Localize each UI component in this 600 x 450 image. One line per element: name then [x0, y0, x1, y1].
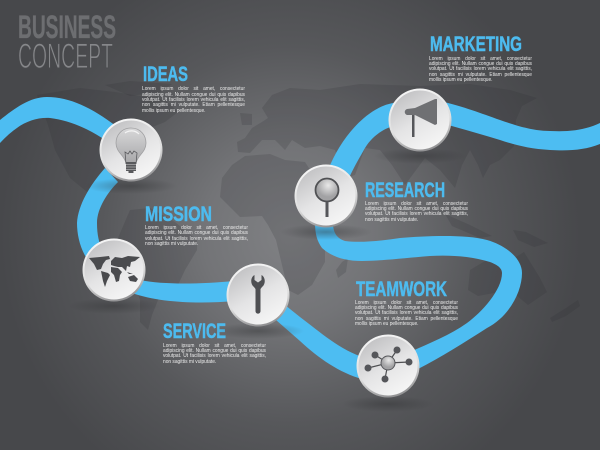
body: research: adipiscing elit. Nullam congue dui quis dapibus	[365, 206, 468, 212]
title: concept: CONCEPT	[18, 37, 113, 76]
icon: world map	[89, 256, 140, 287]
ribbon: service to teamwork	[276, 305, 365, 379]
background world map	[37, 81, 580, 330]
body: teamwork: Lorem ipsum dolor sit amet, consectetur	[355, 300, 458, 306]
node: marketing megaphone	[374, 88, 466, 164]
body: ideas: mollis ipsum eu pellentesque.	[142, 108, 205, 114]
ribbon: research to marketing	[328, 102, 400, 180]
body: service: Lorem ipsum dolor sit amet, consectetur	[163, 343, 266, 349]
body: mission	[145, 225, 248, 247]
icon: light bulb	[116, 128, 146, 173]
body: service	[163, 343, 266, 365]
icon: wrench	[251, 275, 265, 314]
body: marketing: mollis ipsum eu pellentesque.	[429, 77, 492, 83]
body: marketing: non sagittis mi vulputate. Etiam pellentesque	[429, 72, 532, 78]
node: research magnifier	[280, 164, 372, 240]
body: teamwork: adipiscing elit. Nullam congue dui quis dapibus	[355, 305, 458, 311]
heading: marketing: MARKETING	[430, 33, 522, 56]
body: ideas	[142, 86, 245, 114]
body: mission: volutpat. Ut facilisis lorem vehicula elit sagittis,	[145, 236, 248, 242]
icon: magnifier	[316, 178, 338, 217]
body: service: volutpat. Ut facilisis lorem vehicula elit sagittis,	[163, 353, 266, 359]
body: teamwork	[355, 300, 458, 327]
node: mission world map	[68, 238, 160, 314]
body: ideas: non sagittis mi vulputate. Etiam pellentesque	[142, 102, 245, 108]
body: marketing: volutpat. Ut facilisis lorem vehicula elit sagittis,	[429, 66, 532, 72]
body: teamwork: mollis ipsum eu pellentesque.	[355, 321, 418, 327]
body: service: adipiscing elit. Nullam congue dui quis dapibus	[163, 348, 266, 354]
ribbon: ideas to mission	[77, 168, 118, 259]
heading: service: SERVICE	[163, 320, 226, 343]
body: mission: Lorem ipsum dolor sit amet, consectetur	[145, 225, 248, 231]
node: service wrench	[212, 264, 304, 339]
ribbon: mission to service	[132, 280, 235, 302]
body: mission: non sagittis mi vulputate.	[145, 241, 198, 247]
heading: mission: MISSION	[145, 203, 212, 226]
ribbon: marketing to right exit	[440, 101, 600, 150]
title	[18, 9, 116, 76]
node: teamwork network	[342, 334, 434, 412]
ribbon: left entry to ideas	[0, 97, 116, 143]
body: teamwork: non sagittis mi vulputate. Etiam pellentesque	[355, 316, 458, 322]
body: ideas: Lorem ipsum dolor sit amet, consectetur	[142, 86, 245, 92]
heading: teamwork: TEAMWORK	[356, 278, 447, 301]
body: research	[365, 201, 468, 223]
heading: research: RESEARCH	[365, 179, 445, 202]
body: marketing: adipiscing elit. Nullam congue dui quis dapibus	[429, 61, 532, 67]
icon: megaphone	[405, 99, 437, 137]
ribbon: teamwork to research	[315, 222, 522, 369]
body: ideas: adipiscing elit. Nullam congue dui quis dapibus	[142, 92, 245, 98]
node: ideas bulb	[85, 118, 177, 194]
body: mission: adipiscing elit. Nullam congue dui quis dapibus	[145, 230, 248, 236]
body: teamwork: volutpat. Ut facilisis lorem vehicula elit sagittis,	[355, 310, 458, 316]
body: marketing	[429, 56, 532, 83]
ribbon	[0, 97, 600, 379]
body: marketing: Lorem ipsum dolor sit amet, consectetur	[429, 56, 532, 62]
body: service: non sagittis mi vulputate.	[163, 359, 216, 365]
heading: ideas: IDEAS	[143, 63, 188, 86]
icon: network	[364, 346, 412, 382]
body: ideas: volutpat. Ut facilisis lorem vehicula elit sagittis,	[142, 97, 245, 103]
body: research: volutpat. Ut facilisis lorem vehicula elit sagittis,	[365, 211, 468, 217]
title: business: BUSINESS	[18, 9, 116, 45]
body: research: Lorem ipsum dolor sit amet, consectetur	[365, 201, 468, 207]
body: research: non sagittis mi vulputate.	[365, 217, 418, 223]
